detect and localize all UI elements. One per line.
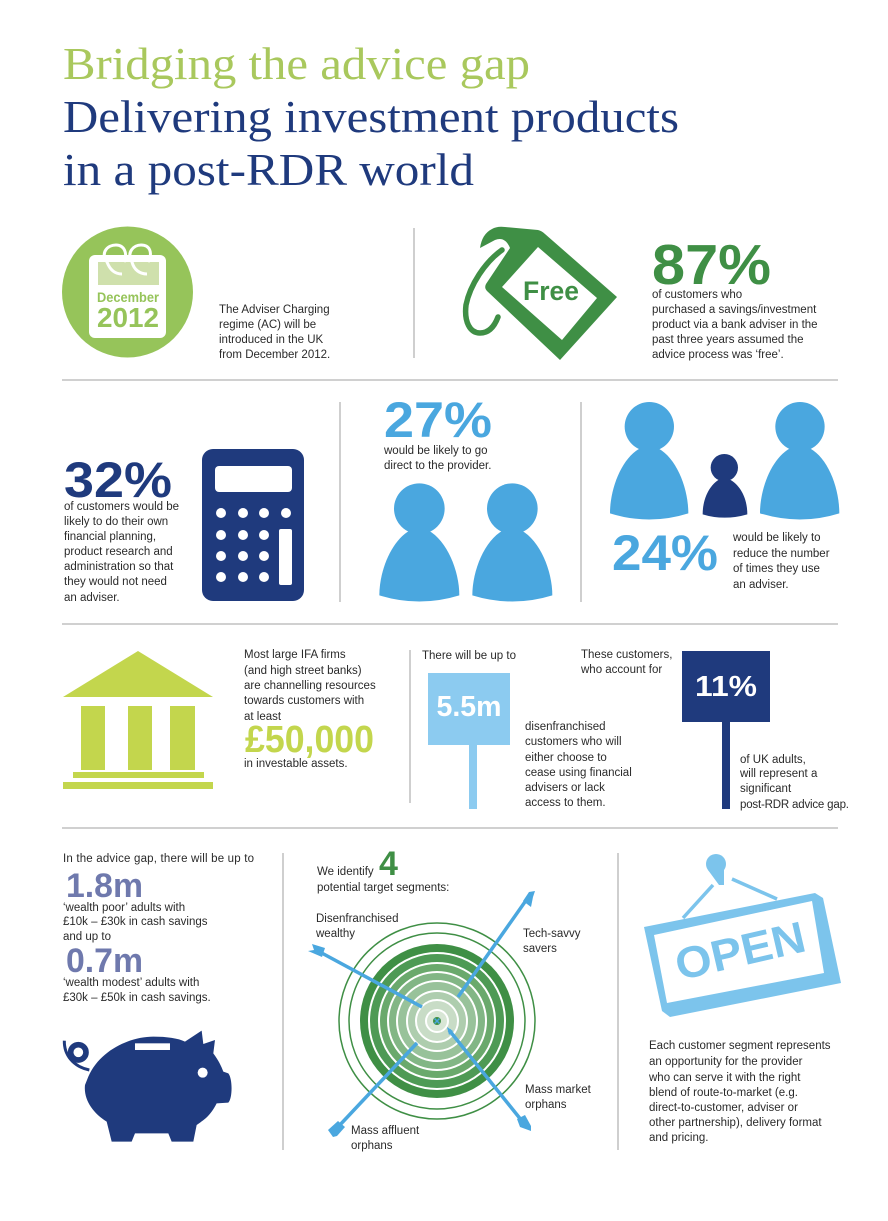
text: open description [648, 1040, 831, 1144]
text: wealth poor: £10k – £30k in cash savings [63, 916, 208, 928]
text: 87% description: of customers who [652, 289, 742, 301]
icon: calendar: 2012 [97, 302, 159, 333]
label: disenfranchised wealthy [315, 913, 398, 940]
icon: piggy bank [64, 1031, 232, 1142]
stat: £50,000: £50,000 [245, 719, 374, 761]
arrow: mass affluent orphans [328, 1043, 417, 1137]
text: 87% description: advice process was ‘free’. [652, 349, 784, 361]
text: target heading: 4 [379, 845, 398, 883]
sign: 11% [682, 651, 770, 809]
title: Bridging the advice gap [63, 38, 530, 89]
text: intro: There will be up to [422, 650, 516, 662]
icon: calendar [62, 226, 193, 358]
stat: 24%: 24% [612, 525, 718, 581]
text: advice gap description [739, 754, 849, 811]
chart: target rings [339, 923, 535, 1119]
icon: open sign: OPEN [671, 913, 810, 990]
label: mass market orphans: Mass market [525, 1084, 592, 1096]
panel: 5.5m disenfranchised [422, 650, 632, 809]
text: disenfranchised description: cease using financial [525, 767, 632, 779]
icon: two people [379, 483, 552, 601]
text: intro: who account for [580, 664, 662, 676]
text: advice gap description: of UK adults, [740, 754, 806, 766]
panel: 11 percent of adults [580, 649, 849, 811]
text: IFA firms: at least [244, 711, 282, 723]
sign: 5.5m: 5.5m [436, 691, 502, 723]
label: mass market orphans [525, 1084, 592, 1111]
label: mass market orphans: orphans [525, 1099, 567, 1111]
label: disenfranchised wealthy: Disenfranchised [316, 913, 398, 925]
label: tech-savvy savers [523, 928, 581, 955]
sign: 5.5m [428, 673, 510, 809]
title [63, 38, 679, 195]
text: IFA firms: Most large IFA firms [244, 649, 346, 661]
stat: 0.7m: 0.7m [66, 942, 143, 980]
icon: bank building [63, 651, 213, 789]
text: disenfranchised description: disenfranchised [525, 721, 606, 733]
text: 32% description [64, 501, 179, 604]
text: IFA firms: are channelling resources [244, 680, 376, 692]
text: wealth poor [63, 902, 208, 943]
text: adviser charging: from December 2012. [219, 349, 330, 361]
text: 24% description: would be likely to [732, 532, 821, 544]
label: tech-savvy savers: savers [523, 943, 557, 955]
text: 32% description: an adviser. [64, 592, 120, 604]
text: 27% description: direct to the provider. [384, 460, 491, 472]
icon: free tag [466, 227, 617, 360]
panel: 32 percent do it themselves [64, 449, 304, 604]
text: disenfranchised description: advisers or lack [525, 782, 605, 794]
panel: open sign [644, 854, 841, 1144]
title: in a post-RDR world [63, 144, 474, 195]
label: mass affluent orphans [351, 1125, 420, 1152]
text: open description: and pricing. [649, 1132, 708, 1144]
text: 87% description: product via a bank adviser in the [652, 319, 818, 331]
text: disenfranchised description: access to them. [525, 797, 606, 809]
panel: 87 percent free advice [466, 227, 818, 361]
text: disenfranchised description: customers who will [525, 736, 622, 748]
text: wealth poor: ‘wealth poor’ adults with [63, 902, 185, 914]
text: advice gap description: will represent a [739, 768, 818, 780]
text: 87% description: purchased a savings/investment [652, 304, 817, 316]
text: adviser charging: The Adviser Charging [219, 304, 330, 316]
text: IFA firms [244, 649, 376, 723]
text: open description: blend of route-to-market (e.g. [649, 1087, 798, 1099]
text: open description: an opportunity for the provider [649, 1056, 803, 1068]
text: adviser charging: regime (AC) will be [219, 319, 316, 331]
label: mass affluent orphans: orphans [351, 1140, 393, 1152]
stat: 27%: 27% [384, 392, 492, 448]
text: target heading: potential target segments: [317, 882, 449, 894]
icon: free tag: Free [523, 276, 579, 306]
stat: 87%: 87% [652, 233, 771, 297]
panel: 27 percent go direct [379, 392, 552, 601]
text: 32% description: administration so that [64, 561, 174, 573]
label: disenfranchised wealthy: wealthy [315, 928, 355, 940]
text: IFA firms: towards customers with [244, 695, 364, 707]
arrow: mass market orphans [447, 1027, 531, 1131]
text: adviser charging [219, 304, 330, 361]
text: 32% description: they would not need [64, 576, 167, 588]
arrow: disenfranchised wealthy [308, 944, 422, 1007]
arrow: tech-savvy savers [458, 891, 535, 997]
text: open description: other partnership), delivery format [649, 1117, 822, 1129]
text: 32% description: product research and [64, 546, 173, 558]
text: 24% description: of times they use [733, 563, 820, 575]
text: intro [580, 649, 672, 676]
text: 24% description [732, 532, 830, 591]
panel: wealth poor and modest [63, 853, 254, 1142]
panel: target segments [308, 845, 592, 1152]
stat: 1.8m: 1.8m [66, 867, 143, 905]
text: 32% description: financial planning, [64, 531, 156, 543]
panel: IFA firms 50000 [63, 649, 376, 789]
text: 24% description: reduce the number [733, 548, 830, 560]
text: 32% description: of customers would be [64, 501, 179, 513]
text: 27% description [383, 445, 491, 472]
text: advice gap intro: In the advice gap, there will be up to [63, 853, 254, 865]
sign: 11%: 11% [695, 671, 757, 703]
text: disenfranchised description [525, 721, 632, 809]
text: intro: These customers, [581, 649, 672, 661]
text: wealth poor: and up to [63, 931, 111, 943]
text: target heading [317, 845, 449, 894]
text: adviser charging: introduced in the UK [219, 334, 324, 346]
text: open description: who can serve it with the right [648, 1072, 801, 1084]
text: target heading: We identify [317, 866, 374, 878]
text: wealth modest [63, 977, 211, 1004]
label: tech-savvy savers: Tech-savvy [523, 928, 581, 940]
text: 24% description: an adviser. [733, 579, 789, 591]
text: disenfranchised description: either choose to [525, 752, 607, 764]
text: advice gap description: post-RDR advice gap. [740, 799, 849, 811]
stat: 32%: 32% [64, 452, 172, 508]
text: 32% description: likely to do their own [64, 516, 168, 528]
text: 87% description [652, 289, 818, 361]
text: IFA firms: (and high street banks) [244, 665, 362, 677]
title: Delivering investment products [63, 91, 679, 142]
icon: calendar: December [97, 289, 160, 305]
label: mass affluent orphans: Mass affluent [351, 1125, 420, 1137]
icon: three people [610, 402, 839, 519]
text: advice gap description: significant [740, 783, 792, 795]
text: investable assets: in investable assets. [244, 758, 348, 770]
text: open description: direct-to-customer, adviser or [649, 1102, 798, 1114]
text: open description: Each customer segment represents [649, 1040, 831, 1052]
text: wealth modest: ‘wealth modest’ adults with [63, 977, 199, 989]
icon: open sign [644, 854, 841, 1017]
icon: calculator [202, 449, 304, 601]
text: 87% description: past three years assumed the [652, 334, 804, 346]
panel: adviser charging date [62, 226, 330, 361]
panel: 24 percent reduce adviser use [610, 402, 839, 591]
text: wealth modest: £30k – £50k in cash savings. [63, 992, 211, 1004]
text: 27% description: would be likely to go [383, 445, 488, 457]
